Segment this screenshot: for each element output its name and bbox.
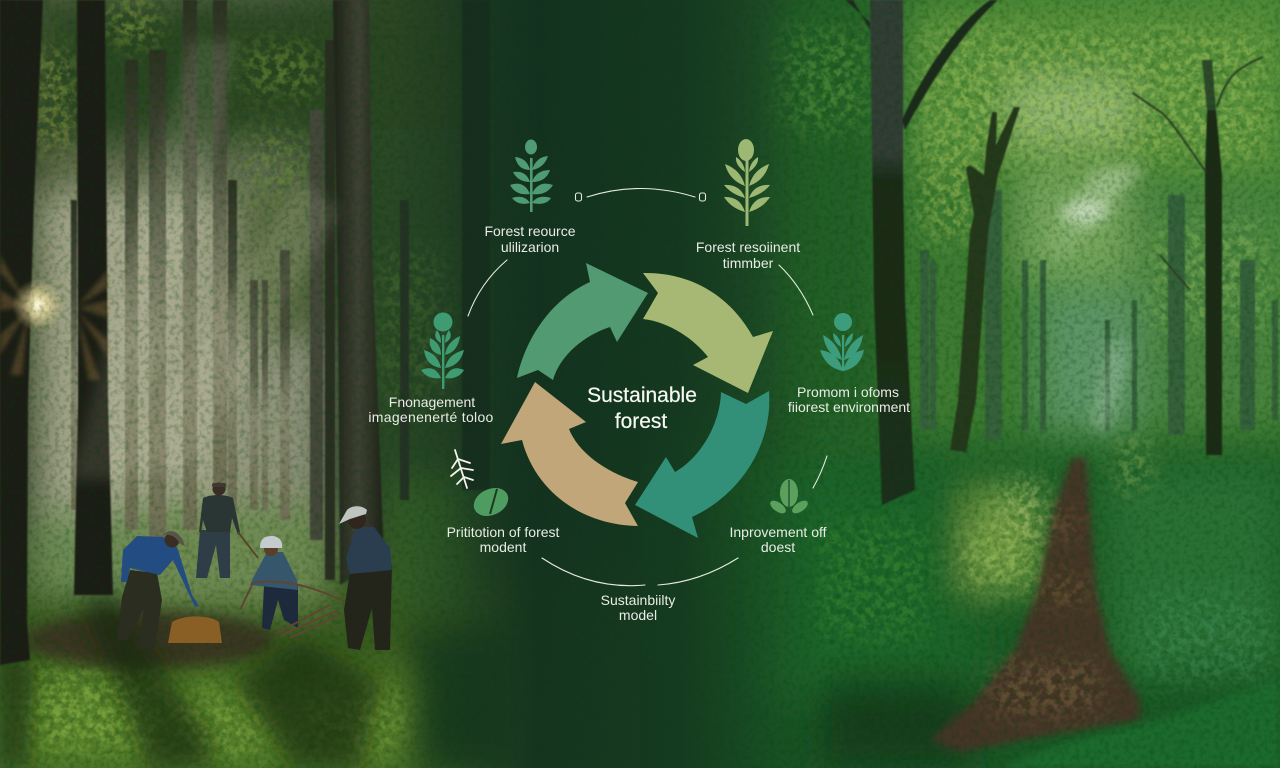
label: management	[368, 394, 494, 425]
label: environment: fiiorest environment	[788, 399, 910, 415]
label: environment: Promom i ofoms	[797, 384, 899, 400]
label: forest resource: Forest reource	[484, 223, 576, 239]
icon: leaf, environment	[820, 313, 864, 371]
arrow: green	[517, 263, 648, 380]
label: improvement	[729, 524, 827, 555]
icon: leaf, management	[421, 312, 464, 389]
workers in the forest	[117, 482, 392, 650]
cycle diagram	[501, 263, 773, 538]
icon: white sprig	[451, 450, 473, 488]
worker 2 standing	[196, 482, 258, 578]
label: forest resource: ulilizarion	[501, 239, 559, 255]
icon: leaf, timber	[724, 139, 770, 226]
connector lines	[468, 188, 827, 586]
forest floor soil and path	[25, 458, 1280, 768]
icon: round leaf	[469, 483, 513, 521]
label: protection: Prititotion of forest	[447, 524, 560, 540]
label: environment	[788, 384, 910, 415]
hay bale	[168, 616, 222, 643]
center title	[587, 384, 697, 433]
label: improvement: Inprovement off	[729, 524, 827, 540]
label: forest timber: Forest resoiinent	[696, 239, 800, 255]
distant and hazy trunks	[71, 0, 1278, 580]
ground shadows	[0, 595, 380, 768]
label: management: Fnonagement	[389, 394, 475, 410]
label: improvement: doest	[761, 539, 795, 555]
center title: forest	[615, 410, 667, 433]
label: management: imagenenerté toloo	[368, 409, 494, 425]
light beams	[70, 40, 1145, 480]
arrow: tan	[501, 382, 638, 526]
label: sustainability	[601, 592, 675, 623]
center title: Sustainable	[587, 384, 697, 407]
arrow: light green	[643, 273, 773, 393]
arrow: teal	[635, 391, 769, 538]
label: sustainability: model	[619, 607, 657, 623]
sun rays	[0, 255, 108, 380]
label: forest resource	[484, 223, 576, 255]
label: forest timber	[696, 239, 800, 271]
label: protection: modent	[480, 539, 526, 555]
worker 3 crouching	[250, 536, 298, 630]
label: protection	[447, 524, 560, 555]
worker 1 bending	[117, 531, 199, 648]
worker 4 foreground	[339, 506, 392, 650]
icon: leaf, forest resource	[510, 140, 553, 212]
label: sustainability: Sustainbiilty	[601, 592, 675, 608]
icon: sprout	[768, 479, 810, 516]
label: forest timber: timmber	[723, 255, 774, 271]
bundle of sticks and rake	[240, 581, 343, 638]
